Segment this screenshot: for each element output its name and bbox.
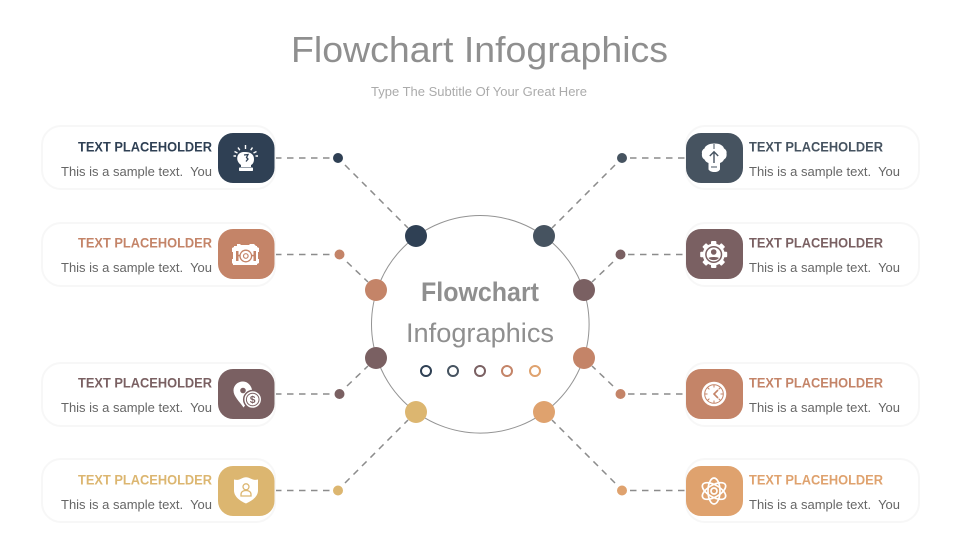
center heading — [406, 277, 554, 348]
connector lines — [275, 158, 686, 490]
center heading: Infographics — [406, 318, 554, 348]
subtitle: Type The Subtitle Of Your Great Here — [371, 84, 587, 99]
icon: brain bulb — [702, 144, 727, 172]
panel: left 1: TEXT PLACEHOLDER — [78, 140, 212, 154]
panel: left 4: TEXT PLACEHOLDER — [78, 472, 212, 488]
icon: location with dollar — [234, 382, 262, 408]
panel: left 4 — [42, 459, 275, 522]
central circle — [372, 215, 589, 433]
panel: right 2: This is a sample text. You — [749, 260, 900, 275]
panel: left 3 — [42, 363, 275, 426]
panel: left 2 — [42, 223, 275, 286]
panel: right 2 — [686, 223, 919, 286]
center heading: Flowchart — [421, 277, 539, 307]
panel: left 3: This is a sample text. You — [61, 400, 212, 415]
panel: left 4: This is a sample text. You — [61, 497, 212, 512]
panel: right 3 — [686, 363, 919, 426]
panel: right 4: This is a sample text. You — [749, 497, 900, 512]
panel: right 4 — [686, 459, 919, 522]
panel: right 4: TEXT PLACEHOLDER — [749, 472, 883, 488]
panel: left 1 — [42, 126, 275, 189]
panel: left 3: TEXT PLACEHOLDER — [78, 376, 212, 390]
panel: right 1: TEXT PLACEHOLDER — [749, 140, 883, 154]
circle nodes — [365, 225, 595, 423]
icon: atom — [700, 478, 728, 504]
small connector dots — [333, 153, 627, 496]
icon: clock — [702, 382, 726, 406]
icon: gear with person — [700, 241, 727, 268]
panel: right 3: This is a sample text. You — [749, 400, 900, 415]
panel: left 2: This is a sample text. You — [61, 260, 212, 275]
panel: left 1: This is a sample text. You — [61, 164, 212, 179]
panel: right 3: TEXT PLACEHOLDER — [749, 376, 883, 390]
icon: shield with person — [234, 477, 258, 504]
panel: right 1 — [686, 126, 919, 189]
center ring dots — [421, 366, 540, 376]
title: Flowchart Infographics — [291, 29, 668, 70]
panel: left 2: TEXT PLACEHOLDER — [78, 236, 212, 250]
panel: right 1: This is a sample text. You — [749, 164, 900, 179]
icon: camera — [232, 244, 259, 265]
icon: idea fist — [234, 145, 258, 171]
icon: location with dollar: $ — [250, 395, 256, 406]
panel: right 2: TEXT PLACEHOLDER — [749, 236, 883, 250]
